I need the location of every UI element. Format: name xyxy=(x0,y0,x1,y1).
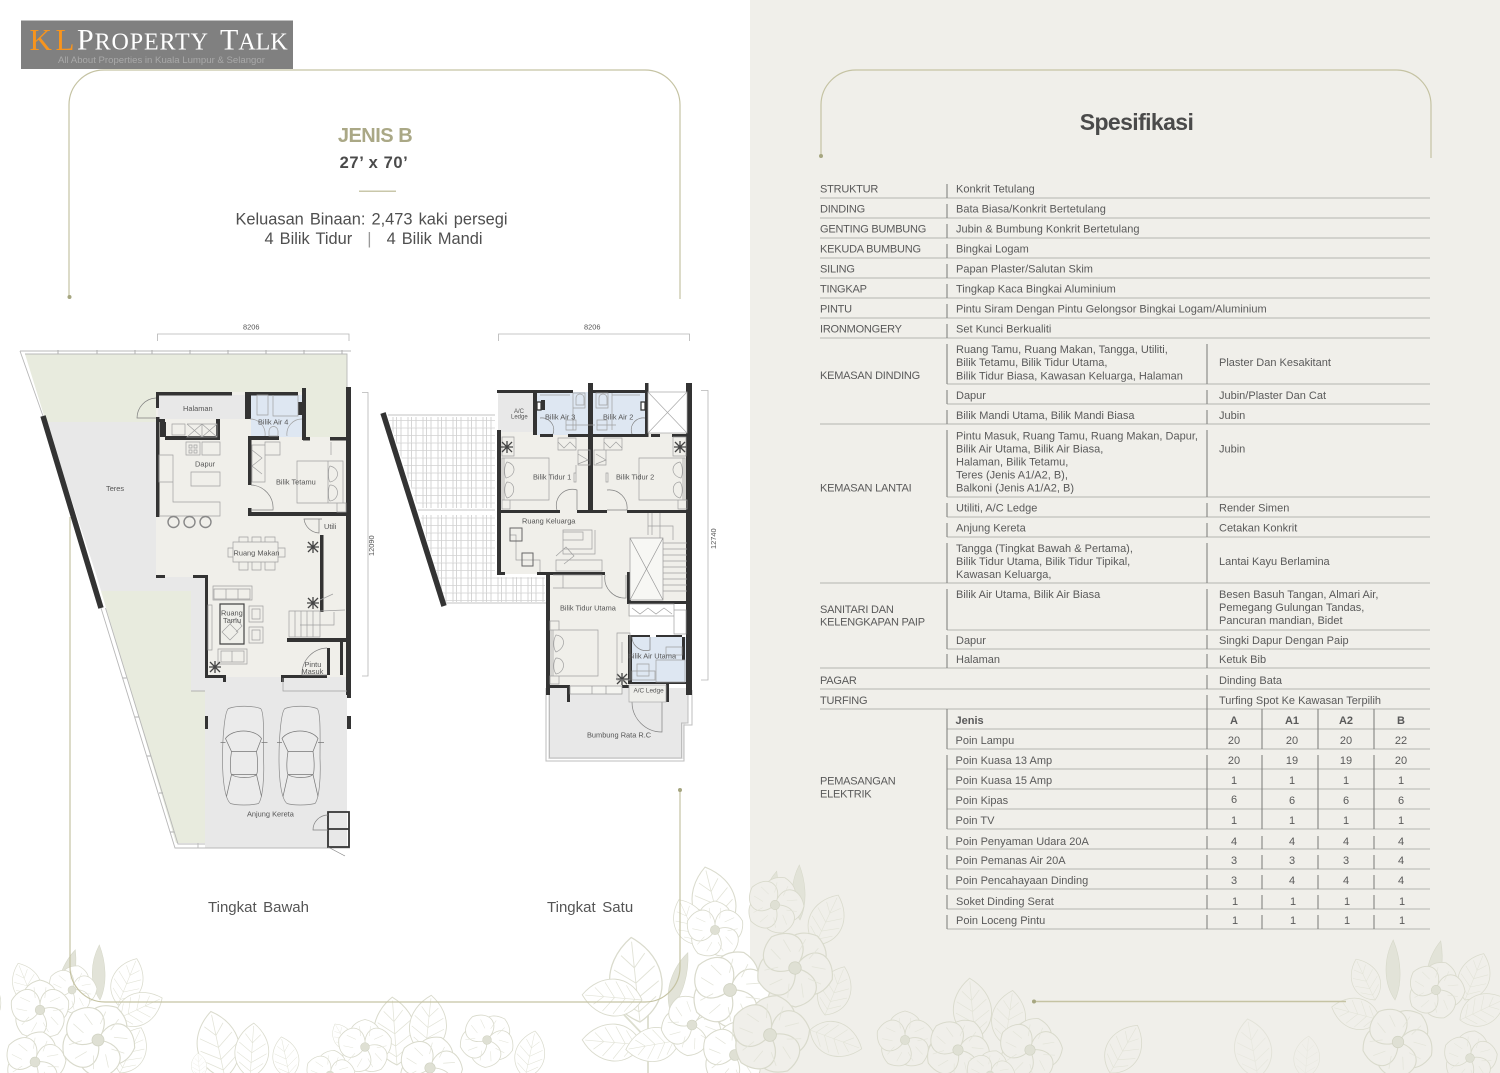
upper floor base xyxy=(497,432,690,690)
category labels: TURFING xyxy=(820,695,867,707)
electrical column A2 xyxy=(1339,715,1353,927)
electrical column A: 6 xyxy=(1231,794,1237,806)
electrical column A2: 19 xyxy=(1340,755,1352,767)
electrical column A: 4 xyxy=(1231,836,1237,848)
room labels: 12740 xyxy=(709,528,718,549)
electrical column A: 1 xyxy=(1231,815,1237,827)
site: terrace xyxy=(46,422,156,577)
built-up area: Keluasan Binaan: 2,473 kaki persegi xyxy=(235,210,508,228)
category labels: DINDING xyxy=(820,204,865,216)
description column: Halaman xyxy=(956,654,1000,666)
finish column: Plaster Dan Kesakitant xyxy=(1219,357,1331,369)
finish column xyxy=(1219,357,1381,707)
room labels: Bilik Tetamu xyxy=(276,478,316,486)
category labels: PEMASANGAN xyxy=(820,776,896,788)
site: garden top xyxy=(25,354,347,440)
electrical column A: 1 xyxy=(1232,896,1238,908)
electrical column A2: 1 xyxy=(1344,896,1350,908)
description column: Bilik Tidur Biasa, Kawasan Keluarga, Halaman xyxy=(956,370,1183,382)
fence ticks xyxy=(58,350,342,832)
electrical column B: B xyxy=(1397,715,1405,727)
finish column: Pemegang Gulungan Tandas, xyxy=(1219,602,1364,614)
description column: Bingkai Logam xyxy=(956,244,1029,256)
stools xyxy=(168,516,211,528)
electrical item names: Poin Lampu xyxy=(956,735,1014,747)
finish column: Render Simen xyxy=(1219,502,1289,514)
bathroom doors and sanitary xyxy=(250,395,302,436)
description column: Bilik Tetamu, Bilik Tidur Utama, xyxy=(956,357,1107,369)
category labels: GENTING BUMBUNG xyxy=(820,224,926,236)
frame: specification panel bottom xyxy=(1032,1000,1346,1004)
electrical column A1: 1 xyxy=(1289,815,1295,827)
room labels: Ruang Keluarga xyxy=(522,516,576,526)
room labels: Halaman xyxy=(183,404,213,413)
floral decoration: right page, left cluster xyxy=(718,865,867,1073)
finish column: Jubin xyxy=(1219,444,1245,456)
wardrobes xyxy=(558,438,622,482)
room labels: Dapur xyxy=(195,460,216,468)
room labels: Ledge xyxy=(511,414,528,420)
electrical column B: 1 xyxy=(1399,896,1405,908)
description column: Ruang Tamu, Ruang Makan, Tangga, Utiliti, xyxy=(956,344,1168,356)
heading: Jenis B: JENIS B xyxy=(338,125,412,147)
category labels: KEMASAN LANTAI xyxy=(820,482,912,494)
porch step xyxy=(191,678,347,691)
category labels: TINGKAP xyxy=(820,284,867,296)
description column: Bilik Tidur Utama, Bilik Tidur Tipikal, xyxy=(956,556,1130,568)
frame: specification panel top xyxy=(819,70,1431,158)
electrical item names: Soket Dinding Serat xyxy=(956,896,1054,908)
bilik air 4 floor xyxy=(251,395,303,437)
room labels: 8206 xyxy=(243,322,259,332)
description column: Jubin & Bumbung Konkrit Bertetulang xyxy=(956,224,1139,236)
cisterns xyxy=(537,402,645,410)
room labels: A/C xyxy=(514,409,525,415)
electrical column A2: 3 xyxy=(1343,855,1349,867)
electrical item names: Jenis xyxy=(956,715,984,727)
description column: Bilik Air Utama, Bilik Air Biasa xyxy=(956,589,1101,601)
door swings xyxy=(540,418,662,732)
room labels: Teres xyxy=(106,484,124,493)
halaman floor xyxy=(158,395,250,419)
electrical column A: 1 xyxy=(1231,775,1237,787)
walls xyxy=(497,383,692,702)
finish column: Cetakan Konkrit xyxy=(1219,522,1297,534)
electrical column B: 4 xyxy=(1398,855,1404,867)
category labels: PAGAR xyxy=(820,675,857,687)
room labels xyxy=(511,322,718,740)
room labels: Tamu xyxy=(223,616,241,625)
bilik air 3 floor xyxy=(537,392,588,435)
guest bed xyxy=(252,442,346,512)
floral decoration: left page, right cluster xyxy=(581,862,786,1073)
electrical item names: Poin Kipas xyxy=(956,795,1009,807)
description column: Bilik Air Utama, Bilik Air Biasa, xyxy=(956,444,1103,456)
category labels: IRONMONGERY xyxy=(820,324,903,336)
room labels: Anjung Kereta xyxy=(247,810,295,818)
master bath fittings xyxy=(632,647,685,682)
electrical column A1: A1 xyxy=(1285,715,1299,727)
table column ticks xyxy=(947,184,1374,929)
electrical item names xyxy=(956,715,1089,927)
finish column: Pancuran mandian, Bidet xyxy=(1219,615,1343,627)
electrical item names: Poin Pencahayaan Dinding xyxy=(956,875,1088,887)
lounge furniture xyxy=(208,586,263,664)
room labels: Ruang xyxy=(221,608,243,618)
room labels: Utili xyxy=(324,522,337,531)
electrical item names: Poin Loceng Pintu xyxy=(956,915,1045,927)
planters xyxy=(501,441,513,453)
description column: Dapur xyxy=(956,635,986,647)
room labels: Bilik Air Utama xyxy=(628,652,677,660)
hob rings xyxy=(189,445,197,453)
electrical column A: 3 xyxy=(1231,855,1237,867)
logo: KL Property Talk: All About Properties in Kuala Lumpur & Selangor xyxy=(58,55,266,66)
planters xyxy=(307,541,319,553)
electrical column B: 4 xyxy=(1398,836,1404,848)
room labels: Bilik Air 3 xyxy=(545,412,575,422)
room labels: Bilik Tidur 2 xyxy=(616,472,654,482)
dining set xyxy=(228,537,285,570)
finish column: Besen Basuh Tangan, Almari Air, xyxy=(1219,589,1378,601)
bilik air 2 floor xyxy=(593,392,645,435)
electrical column A1: 4 xyxy=(1289,836,1295,848)
void box top right xyxy=(648,392,687,433)
bed 1 xyxy=(502,437,549,509)
desk chairs xyxy=(510,528,533,566)
electrical column A: 1 xyxy=(1232,915,1238,927)
electrical column A: 20 xyxy=(1228,735,1240,747)
category labels: PINTU xyxy=(820,304,852,316)
description column: Set Kunci Berkualiti xyxy=(956,324,1051,336)
finish column: Jubin/Plaster Dan Cat xyxy=(1219,390,1326,402)
category labels: KEMASAN DINDING xyxy=(820,370,920,382)
door swings xyxy=(137,398,345,856)
roof tiles lower xyxy=(420,515,545,602)
description column: Dapur xyxy=(956,390,986,402)
room labels: Bilik Air 2 xyxy=(603,412,633,422)
walls xyxy=(156,387,351,729)
electrical column B: 20 xyxy=(1395,755,1407,767)
specification table xyxy=(820,184,1430,929)
stairs xyxy=(289,594,345,637)
category labels: SILING xyxy=(820,264,855,276)
category labels xyxy=(820,184,926,800)
rooms summary: 4 Bilik Tidur | 4 Bilik Mandi xyxy=(264,230,483,248)
stair treads xyxy=(648,513,687,591)
logo: KL Property Talk: TALK xyxy=(220,24,288,56)
electrical column A2: 4 xyxy=(1343,875,1349,887)
ac ledge lower xyxy=(629,685,666,702)
dimension right xyxy=(362,392,368,676)
logo: KL Property Talk: K xyxy=(30,22,52,57)
floor plan: first floor xyxy=(383,322,718,761)
meter room xyxy=(328,812,349,847)
electrical column A1: 20 xyxy=(1286,735,1298,747)
description column: Kawasan Keluarga, xyxy=(956,569,1051,581)
electrical column B: 1 xyxy=(1399,915,1405,927)
caption: ground floor: Tingkat Bawah xyxy=(208,899,309,916)
description column: Teres (Jenis A1/A2, B), xyxy=(956,470,1068,482)
electrical item names: Poin Kuasa 15 Amp xyxy=(956,775,1052,787)
electrical column B: 6 xyxy=(1398,795,1404,807)
room labels: Bilik Air 4 xyxy=(258,418,288,426)
roof tiles border xyxy=(388,415,546,603)
category labels: SANITARI DAN xyxy=(820,604,894,616)
left page background xyxy=(0,0,750,1073)
electrical column A2: 6 xyxy=(1343,795,1349,807)
electrical column B: 1 xyxy=(1398,775,1404,787)
electrical column A2: A2 xyxy=(1339,715,1353,727)
porch floor xyxy=(205,677,347,848)
finish column: Jubin xyxy=(1219,410,1245,422)
kitchen xyxy=(159,424,220,516)
electrical column A1: 1 xyxy=(1290,896,1296,908)
roof tiles upper xyxy=(388,417,495,508)
electrical column A1: 4 xyxy=(1289,875,1295,887)
description column: Anjung Kereta xyxy=(956,522,1027,534)
electrical column A: 20 xyxy=(1228,755,1240,767)
site: lower garden xyxy=(101,591,205,843)
dimension top xyxy=(498,334,690,341)
electrical column A: 3 xyxy=(1231,875,1237,887)
category labels: STRUKTUR xyxy=(820,184,878,196)
right page background xyxy=(750,0,1500,1073)
electrical column B xyxy=(1395,715,1407,927)
caption: first floor: Tingkat Satu xyxy=(547,899,633,916)
dimension top xyxy=(158,334,349,341)
plot size: 27’ x 70’ xyxy=(340,154,408,172)
floral decoration: right page, right cluster xyxy=(1229,940,1500,1073)
logo: KL Property Talk: L xyxy=(56,22,74,57)
electrical item names: Poin TV xyxy=(956,815,995,827)
table row lines xyxy=(820,198,1430,929)
room labels: A/C Ledge xyxy=(634,688,664,694)
description column: Tangga (Tingkat Bawah & Pertama), xyxy=(956,543,1133,555)
electrical column A: A xyxy=(1230,715,1238,727)
divider xyxy=(359,190,396,192)
electrical item names: Poin Pemanas Air 20A xyxy=(956,855,1066,867)
site outline xyxy=(20,351,351,848)
electrical column B: 22 xyxy=(1395,735,1407,747)
electrical column A1: 6 xyxy=(1289,795,1295,807)
bilik air utama floor xyxy=(632,637,688,683)
balcony window xyxy=(570,686,622,694)
electrical column A1: 3 xyxy=(1289,855,1295,867)
master bed xyxy=(550,621,630,684)
electrical column A1: 1 xyxy=(1289,775,1295,787)
room labels: Bumbung Rata R.C xyxy=(587,730,652,740)
electrical item names: Poin Penyaman Udara 20A xyxy=(956,836,1089,848)
electrical column A1: 1 xyxy=(1290,915,1296,927)
electrical column A xyxy=(1228,715,1240,927)
floral decoration: right page, centre cluster xyxy=(873,977,1152,1073)
finish column: Dinding Bata xyxy=(1219,675,1283,687)
room labels: 12090 xyxy=(367,535,376,556)
description column: Utiliti, A/C Ledge xyxy=(956,502,1037,514)
description column: Konkrit Tetulang xyxy=(956,184,1035,196)
electrical column A2: 1 xyxy=(1343,815,1349,827)
family lounge xyxy=(510,530,602,588)
electrical column A1: 19 xyxy=(1286,755,1298,767)
description column: Bata Biasa/Konkrit Bertetulang xyxy=(956,204,1106,216)
finish column: Turfing Spot Ke Kawasan Terpilih xyxy=(1219,695,1381,707)
description column xyxy=(956,184,1267,666)
house floor xyxy=(156,392,347,677)
description column: Papan Plaster/Salutan Skim xyxy=(956,264,1093,276)
electrical column B: 1 xyxy=(1398,815,1404,827)
void box stairs xyxy=(630,538,663,600)
electrical column A1 xyxy=(1285,715,1299,927)
parked cars xyxy=(220,706,268,805)
electrical column A2: 4 xyxy=(1343,836,1349,848)
dimension right xyxy=(701,390,708,680)
balcony floor xyxy=(548,688,688,759)
electrical item names: Poin Kuasa 13 Amp xyxy=(956,755,1052,767)
dressing area xyxy=(629,604,686,634)
frame: left panel bottom xyxy=(70,517,682,1002)
logo: KL Property Talk xyxy=(21,20,293,69)
description column: Balkoni (Jenis A1/A2, B) xyxy=(956,482,1074,494)
floral decoration: left page, centre cluster xyxy=(190,993,549,1073)
frame: left panel top xyxy=(68,70,680,299)
room labels: Masuk xyxy=(302,667,324,676)
floral decoration: left page, left cluster xyxy=(0,945,169,1073)
diagonal boundary wall xyxy=(43,416,101,608)
electrical column A2: 20 xyxy=(1340,735,1352,747)
site: paved strip xyxy=(97,577,205,691)
finish column: Singki Dapur Dengan Paip xyxy=(1219,635,1349,647)
bathroom fittings xyxy=(540,393,640,430)
balcony outline xyxy=(546,688,692,761)
finish column: Lantai Kayu Berlamina xyxy=(1219,556,1331,568)
category labels: KEKUDA BUMBUNG xyxy=(820,244,921,256)
room labels: Ruang Makan xyxy=(234,548,280,558)
room labels: Bilik Tidur Utama xyxy=(560,604,617,612)
category labels: ELEKTRIK xyxy=(820,788,872,800)
electrical column A2: 1 xyxy=(1344,915,1350,927)
electrical column A2: 1 xyxy=(1343,775,1349,787)
logo: KL Property Talk: PROPERTY xyxy=(77,24,209,56)
description column: Halaman, Bilik Tetamu, xyxy=(956,456,1068,468)
room labels xyxy=(106,322,376,818)
electrical column B: 4 xyxy=(1398,875,1404,887)
room labels: Pintu xyxy=(304,660,321,669)
floor plan: ground floor xyxy=(20,322,376,856)
description column: Bilik Mandi Utama, Bilik Mandi Biasa xyxy=(956,410,1135,422)
category labels: KELENGKAPAN PAIP xyxy=(820,616,925,628)
heading: Spesifikasi: Spesifikasi xyxy=(1080,109,1193,135)
bed 2 xyxy=(639,437,687,509)
coffee table xyxy=(220,604,244,644)
description column: Pintu Masuk, Ruang Tamu, Ruang Makan, Dapur, xyxy=(956,430,1198,442)
room labels: Bilik Tidur 1 xyxy=(533,472,571,482)
description column: Tingkap Kaca Bingkai Aluminium xyxy=(956,284,1116,296)
room labels: 8206 xyxy=(584,322,600,332)
diagonal boundary wall xyxy=(383,413,444,606)
finish column: Ketuk Bib xyxy=(1219,654,1266,666)
description column: Pintu Siram Dengan Pintu Gelongsor Bingkai Logam/Aluminium xyxy=(956,304,1267,316)
ac ledge floor xyxy=(498,391,534,432)
